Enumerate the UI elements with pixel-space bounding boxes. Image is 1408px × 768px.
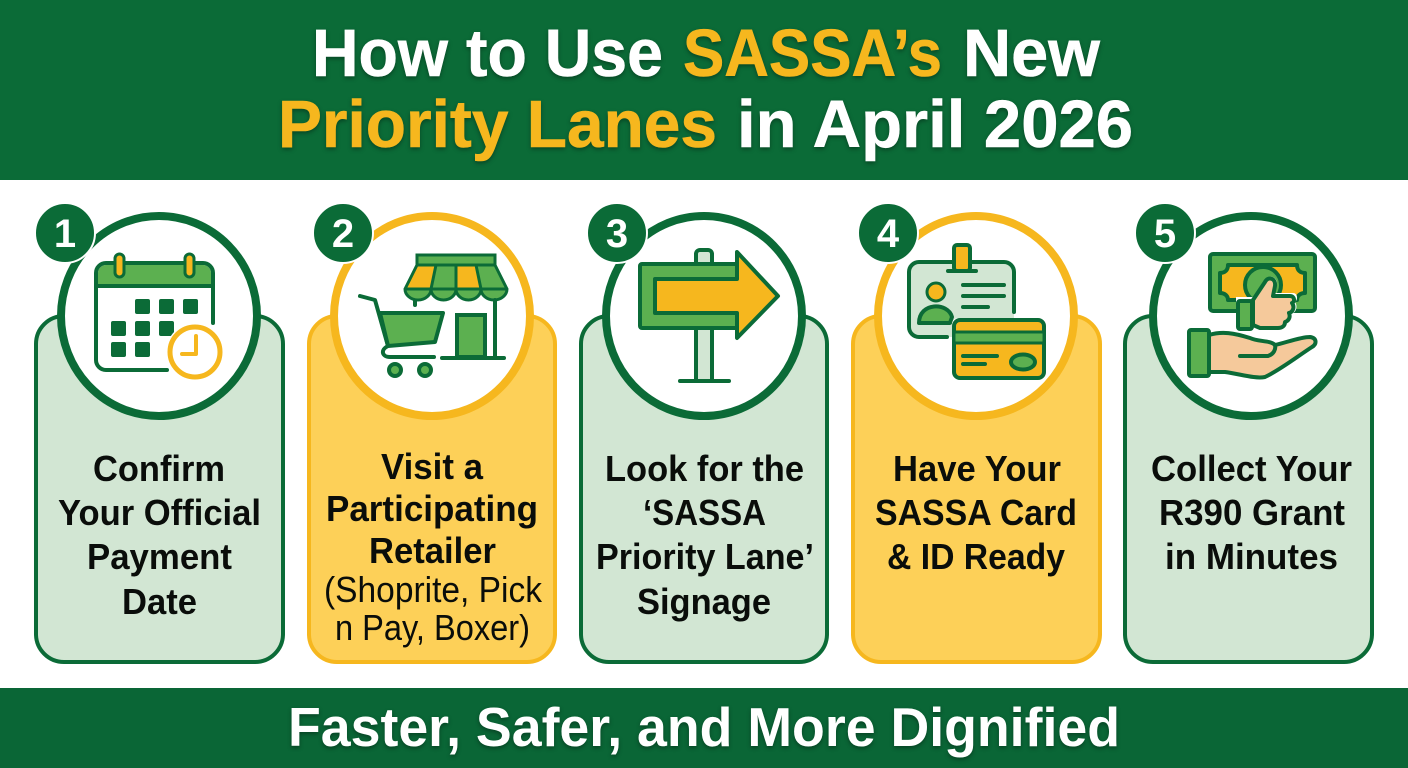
- number badge 5: 5: [1154, 212, 1176, 256]
- step 2 text: Visit a: [381, 446, 484, 487]
- icon circle: [878, 216, 1074, 416]
- icon: calendar with clock: [96, 254, 224, 381]
- step 2 text: Retailer: [369, 530, 496, 571]
- step 1 text: [58, 448, 261, 622]
- icon: shopping cart and store: [360, 255, 507, 376]
- step 3 text: Priority Lane’: [596, 536, 814, 577]
- title: How to Use: [312, 16, 663, 91]
- footer banner: [0, 688, 1408, 768]
- card body: [853, 316, 1100, 662]
- number badge 3: 3: [606, 212, 628, 256]
- step 3 text: Look for the: [605, 448, 804, 489]
- step 1 text: Confirm: [93, 448, 225, 489]
- step 5 text: [1151, 448, 1352, 577]
- step 3 text: [596, 448, 814, 622]
- icon: cash, thumbs up and open hand: [1189, 254, 1316, 377]
- step 4 text: Have Your: [893, 448, 1061, 489]
- step 2 text: [324, 446, 543, 648]
- card body: [36, 316, 283, 662]
- icon circle: [61, 216, 257, 416]
- step 4 text: & ID Ready: [887, 536, 1066, 577]
- panel: step 5: [1125, 203, 1372, 662]
- title: [278, 16, 1133, 162]
- number badge 1: 1: [54, 212, 76, 256]
- number badge 2: 2: [332, 212, 354, 256]
- step 1 text: Date: [122, 581, 197, 622]
- title: New: [963, 16, 1101, 91]
- title: SASSA’s: [683, 16, 942, 91]
- step 5 text: Collect Your: [1151, 448, 1352, 489]
- number badge 3: [587, 203, 647, 263]
- panel: step 2: [309, 203, 555, 662]
- footer tagline: Faster, Safer, and More Dignified: [288, 696, 1120, 758]
- card body: [1125, 316, 1372, 662]
- number badge 5: [1135, 203, 1195, 263]
- card body: [581, 316, 827, 662]
- number badge 1: [35, 203, 95, 263]
- icon circle: [606, 216, 802, 416]
- header banner: [0, 0, 1408, 180]
- step 3 text: Signage: [637, 581, 771, 622]
- panel: step 1: [35, 203, 283, 662]
- step 2 text: Participating: [326, 488, 538, 529]
- step 3 text: ‘SASSA: [643, 492, 766, 533]
- icon circle: [1153, 216, 1349, 416]
- number badge 2: [313, 203, 373, 263]
- number badge 4: [858, 203, 918, 263]
- icon: directional sign: [640, 250, 778, 381]
- card body: [309, 316, 555, 662]
- step 1 text: Your Official: [58, 492, 261, 533]
- title: in April 2026: [737, 87, 1133, 162]
- step 1 text: Payment: [87, 536, 232, 577]
- title: Priority Lanes: [278, 87, 717, 162]
- step 5 text: R390 Grant: [1159, 492, 1345, 533]
- icon: ID badge and bank card: [909, 245, 1044, 378]
- step 2 text: (Shoprite, Pick: [324, 569, 543, 610]
- icon circle: [334, 216, 530, 416]
- step 4 text: [875, 448, 1077, 577]
- step 5 text: in Minutes: [1165, 536, 1338, 577]
- panel: step 4: [853, 203, 1100, 662]
- step 4 text: SASSA Card: [875, 492, 1077, 533]
- panel: step 3: [581, 203, 827, 662]
- number badge 4: 4: [877, 212, 900, 256]
- step 2 text: n Pay, Boxer): [335, 607, 530, 648]
